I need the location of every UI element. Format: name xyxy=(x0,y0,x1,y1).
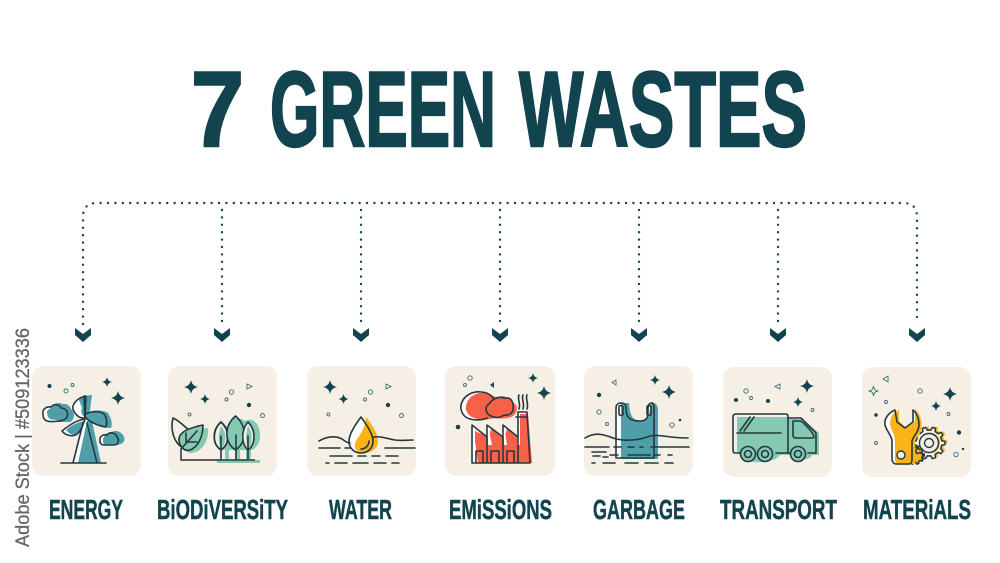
label: biodiversity: BiODiVERSiTY xyxy=(157,494,288,525)
icon: wind turbine xyxy=(43,377,125,463)
panel: energy xyxy=(32,366,141,476)
title: GREEN xyxy=(270,49,496,169)
title: WASTES xyxy=(519,49,807,169)
panel: materials xyxy=(862,367,971,477)
panel: water xyxy=(307,366,416,476)
icon: truck xyxy=(733,379,819,462)
label: garbage: GARBAGE xyxy=(593,494,685,525)
label: emissions: EMiSSiONS xyxy=(449,494,552,525)
icon: plastic bag xyxy=(585,375,689,463)
icon: leaves and trees xyxy=(172,380,264,462)
label: transport: TRANSPORT xyxy=(720,494,837,525)
dotted connector tree xyxy=(83,203,917,324)
label: energy: ENERGY xyxy=(49,494,123,525)
panel: emissions xyxy=(445,366,555,476)
icon: wrench and gears xyxy=(868,376,964,464)
arrowheads xyxy=(75,328,925,342)
panel: biodiversity xyxy=(168,366,277,476)
label: water: WATER xyxy=(329,494,392,525)
watermark: stock id: Adobe Stock | #509123336 xyxy=(13,328,34,547)
panel: transport xyxy=(723,367,832,477)
panel: garbage xyxy=(584,366,693,476)
title: 7 xyxy=(191,49,244,169)
icon: water drop xyxy=(319,380,415,463)
icon: factory xyxy=(456,373,551,463)
